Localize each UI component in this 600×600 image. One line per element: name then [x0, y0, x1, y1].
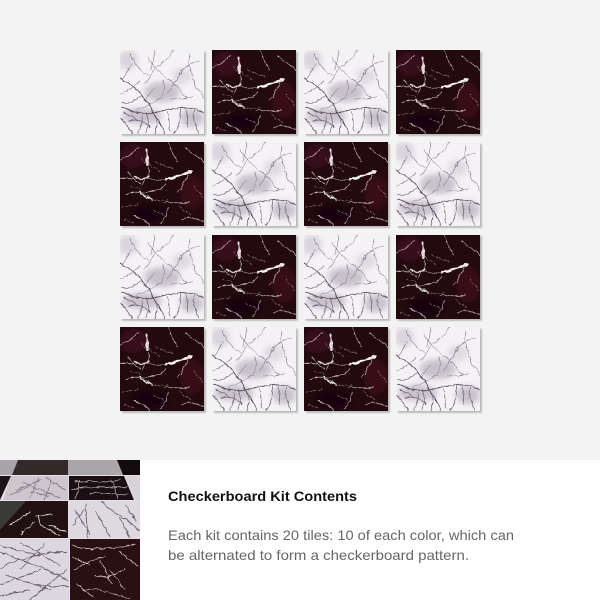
body text: [168, 527, 514, 563]
body text: be alternated to form a checkerboard pattern.: [168, 547, 469, 563]
heading: Checkerboard Kit Contents: [168, 488, 357, 504]
body text: Each kit contains 20 tiles: 10 of each color, which can: [168, 527, 514, 543]
page background: [0, 0, 600, 460]
tile grid: 4 by 4 checkerboard layout: [118, 50, 482, 413]
photo: checkerboard floor in perspective: [0, 460, 140, 600]
bottom white panel: [0, 460, 600, 600]
